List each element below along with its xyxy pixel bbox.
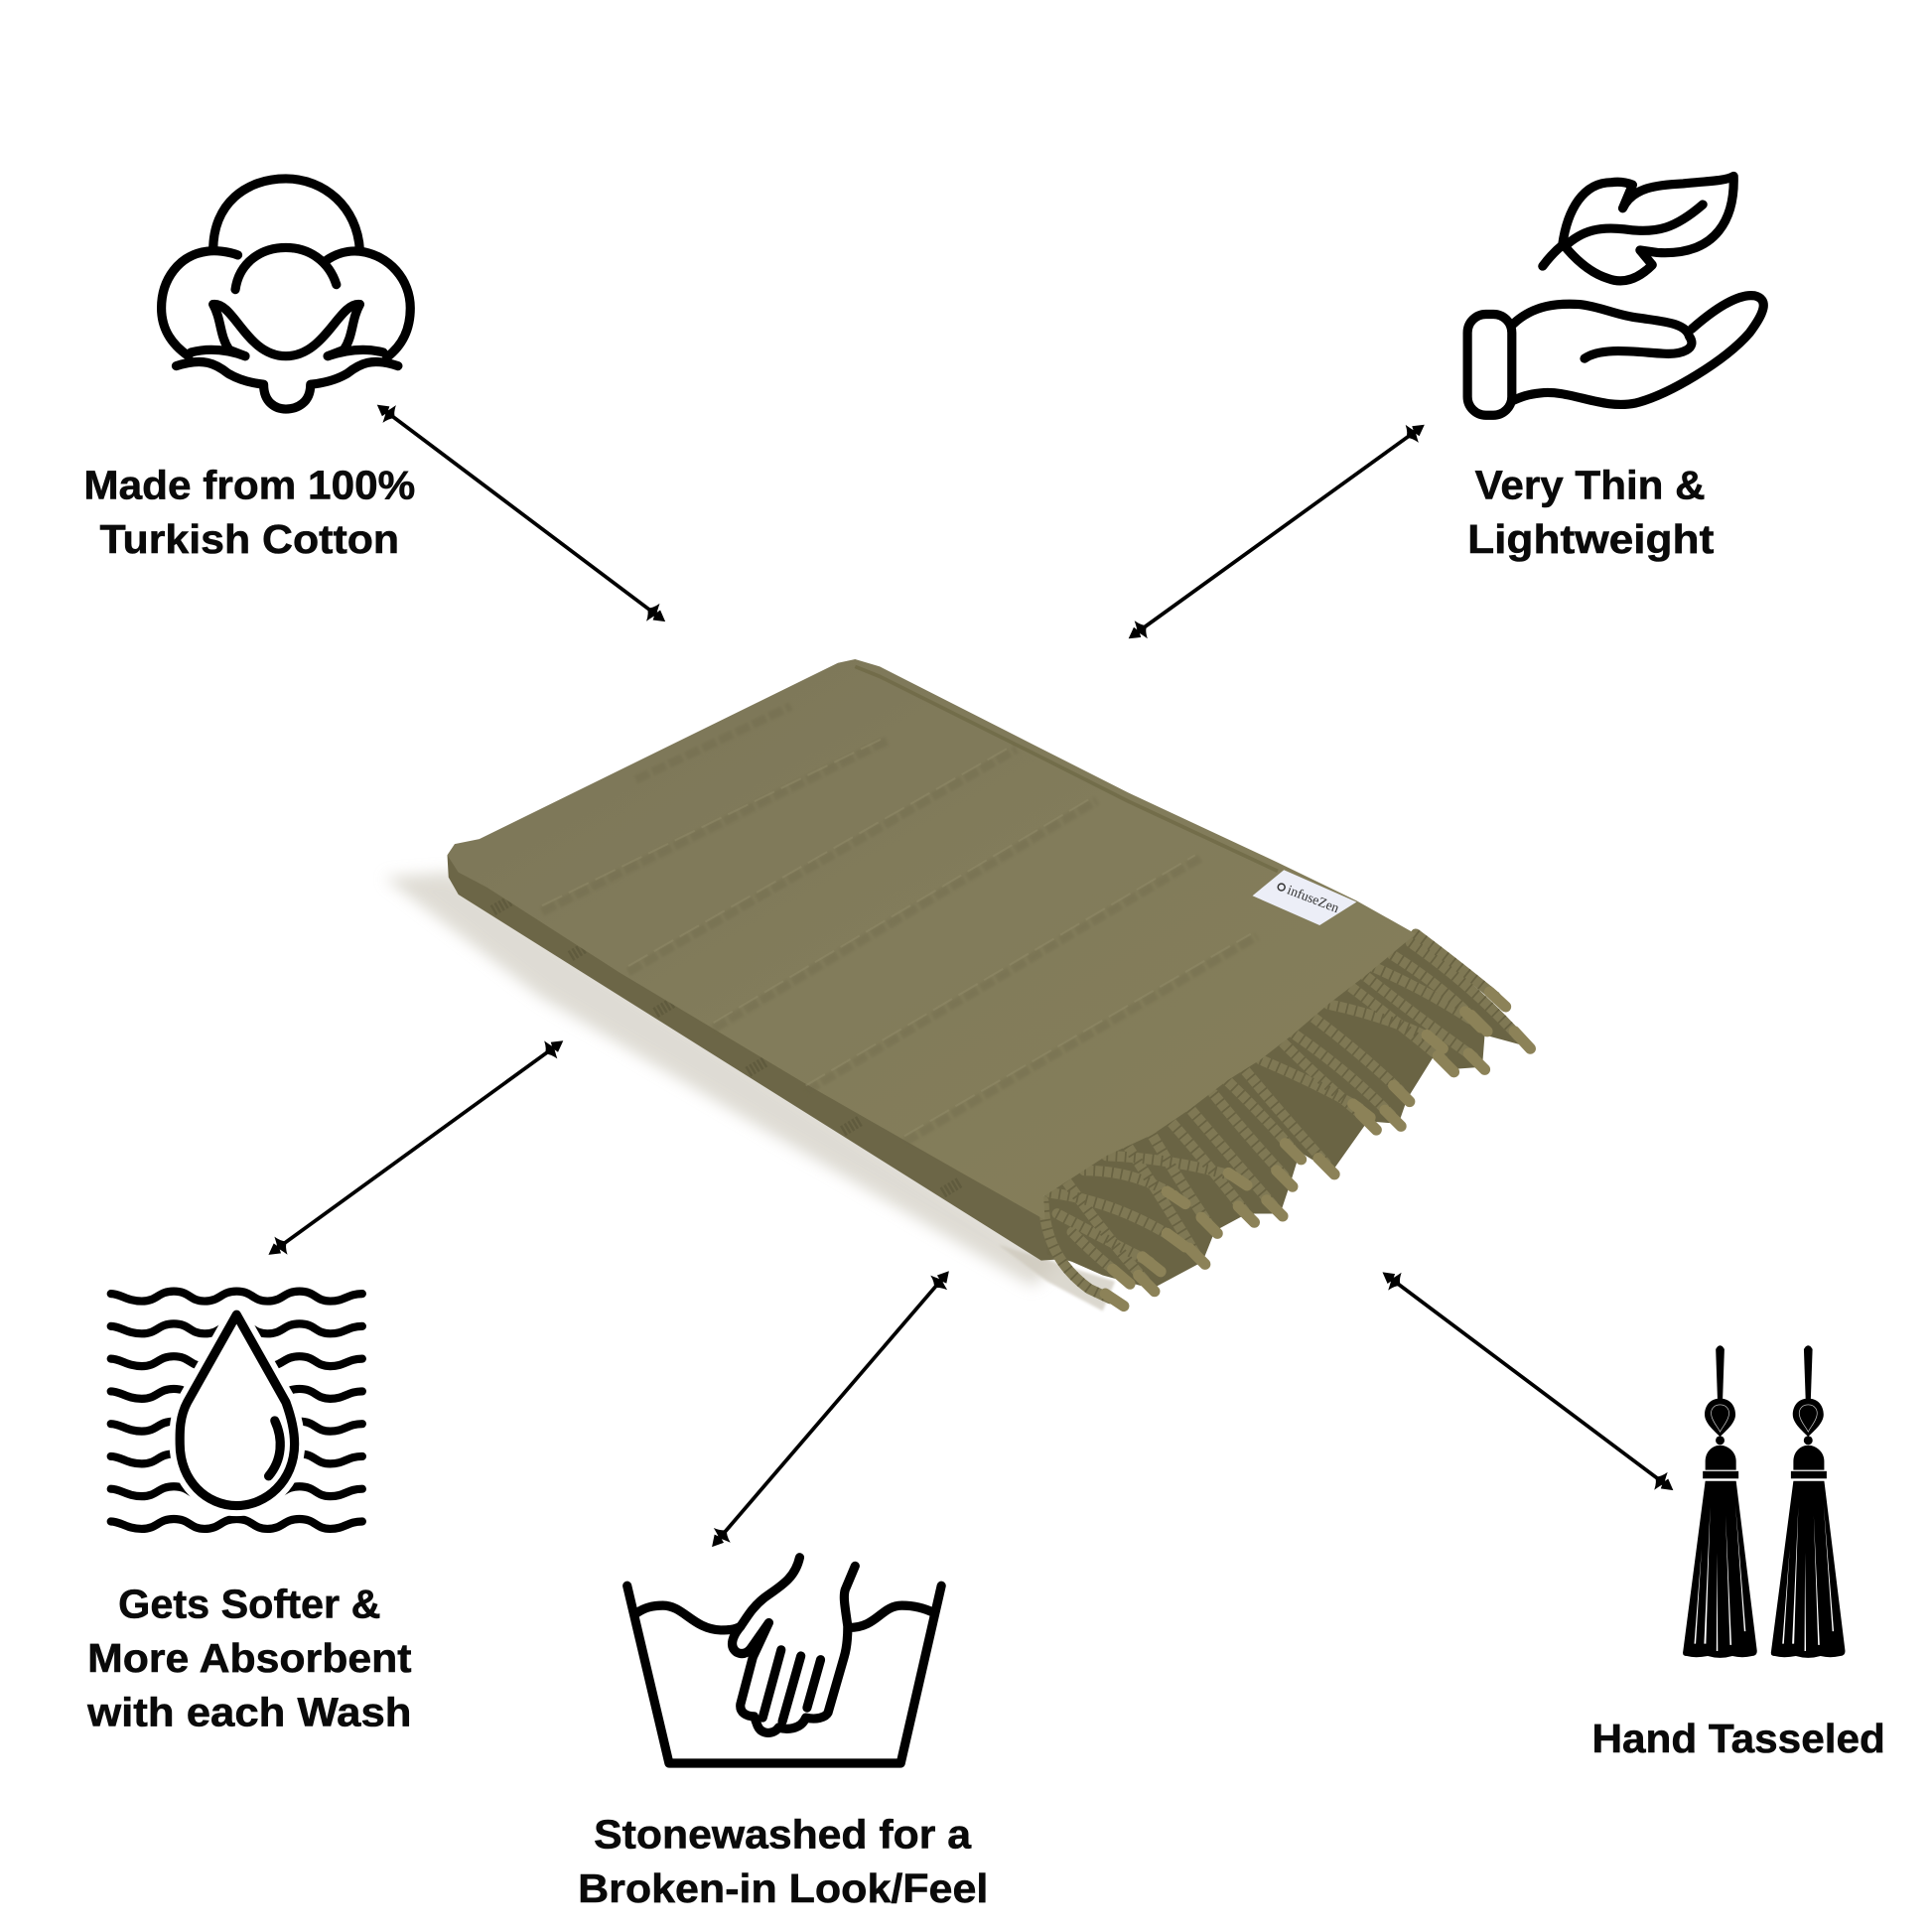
- label: stonewashed: Stonewashed for a: [594, 1812, 972, 1858]
- icon: hand wash basin: [627, 1558, 941, 1763]
- towel woven bands: [542, 706, 1257, 1142]
- under layer bands: [492, 900, 961, 1192]
- label: lightweight: Very Thin &: [1475, 463, 1706, 508]
- label: softer and absorbent: More Absorbent: [87, 1635, 412, 1681]
- label: lightweight: [1467, 463, 1715, 562]
- tassel left: [1683, 1345, 1757, 1658]
- label: hand tasseled: Hand Tasseled: [1591, 1716, 1885, 1761]
- icon: pair of tassels: [1683, 1345, 1846, 1658]
- arrow: lightweight to towel: [1122, 416, 1431, 647]
- icon: leaf over open hand: [1467, 176, 1763, 415]
- label: stonewashed: [578, 1812, 988, 1911]
- arrow: stonewashed to towel: [704, 1264, 957, 1554]
- arrow: tassels to towel: [1376, 1263, 1680, 1499]
- arrow: absorbency to towel: [262, 1032, 570, 1264]
- label: softer and absorbent: [86, 1582, 412, 1735]
- towel under layer: [448, 855, 1059, 1261]
- towel cast shadow: [384, 873, 1115, 1311]
- product photo: folded olive towel: [384, 659, 1530, 1311]
- towel top surface: [448, 659, 1416, 1220]
- label: stonewashed: Broken-in Look/Feel: [578, 1865, 988, 1911]
- towel hem: [855, 666, 1278, 871]
- towel brand label: [1253, 870, 1356, 925]
- icon: cotton boll: [162, 179, 410, 409]
- towel fringe: [1043, 934, 1530, 1307]
- arrow: cotton to towel: [370, 396, 672, 630]
- label: cotton: Turkish Cotton: [100, 516, 399, 562]
- label: softer and absorbent: with each Wash: [86, 1690, 412, 1735]
- label: softer and absorbent: Gets Softer &: [118, 1582, 380, 1627]
- icon: water drop with waves: [111, 1292, 362, 1529]
- label: cotton: Made from 100%: [83, 463, 415, 508]
- label: lightweight: Lightweight: [1467, 516, 1715, 562]
- tassel right: [1771, 1345, 1846, 1658]
- towel brand label: infuseZen: [1286, 883, 1341, 915]
- label: cotton: [83, 463, 415, 562]
